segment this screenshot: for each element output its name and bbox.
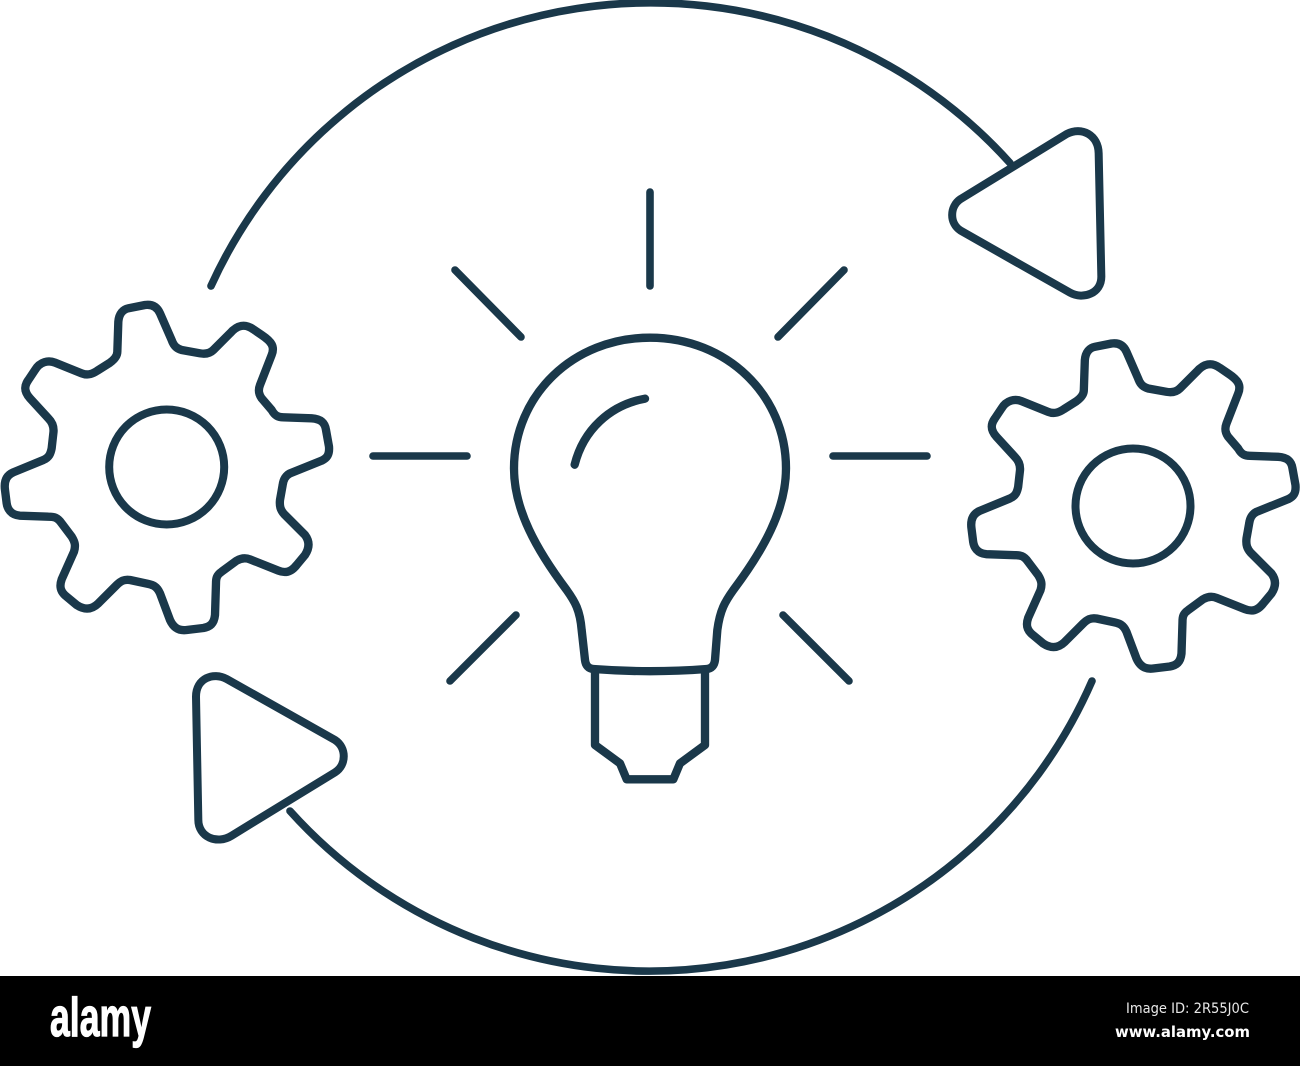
cycle arc: top xyxy=(211,3,1010,286)
image id: Image ID: 2R55J0C xyxy=(1126,1001,1249,1017)
left gear teeth outline xyxy=(5,305,329,630)
right gear hub xyxy=(1076,448,1190,564)
light rays xyxy=(373,192,927,681)
left gear hub xyxy=(109,410,224,524)
arrow head: bottom left xyxy=(196,676,344,840)
website: www.alamy.com xyxy=(1115,1023,1250,1041)
bulb glass xyxy=(514,338,786,671)
bulb screw base xyxy=(595,670,705,779)
cycle arc: bottom xyxy=(290,681,1092,971)
footer logo: alamy xyxy=(50,986,151,1048)
footer bar xyxy=(0,976,1300,1066)
right gear teeth outline xyxy=(971,343,1296,669)
light bulb xyxy=(514,338,786,779)
left gear xyxy=(5,305,329,630)
right gear xyxy=(971,343,1296,669)
arrow head: top right xyxy=(952,131,1101,296)
bulb highlight xyxy=(575,399,645,465)
